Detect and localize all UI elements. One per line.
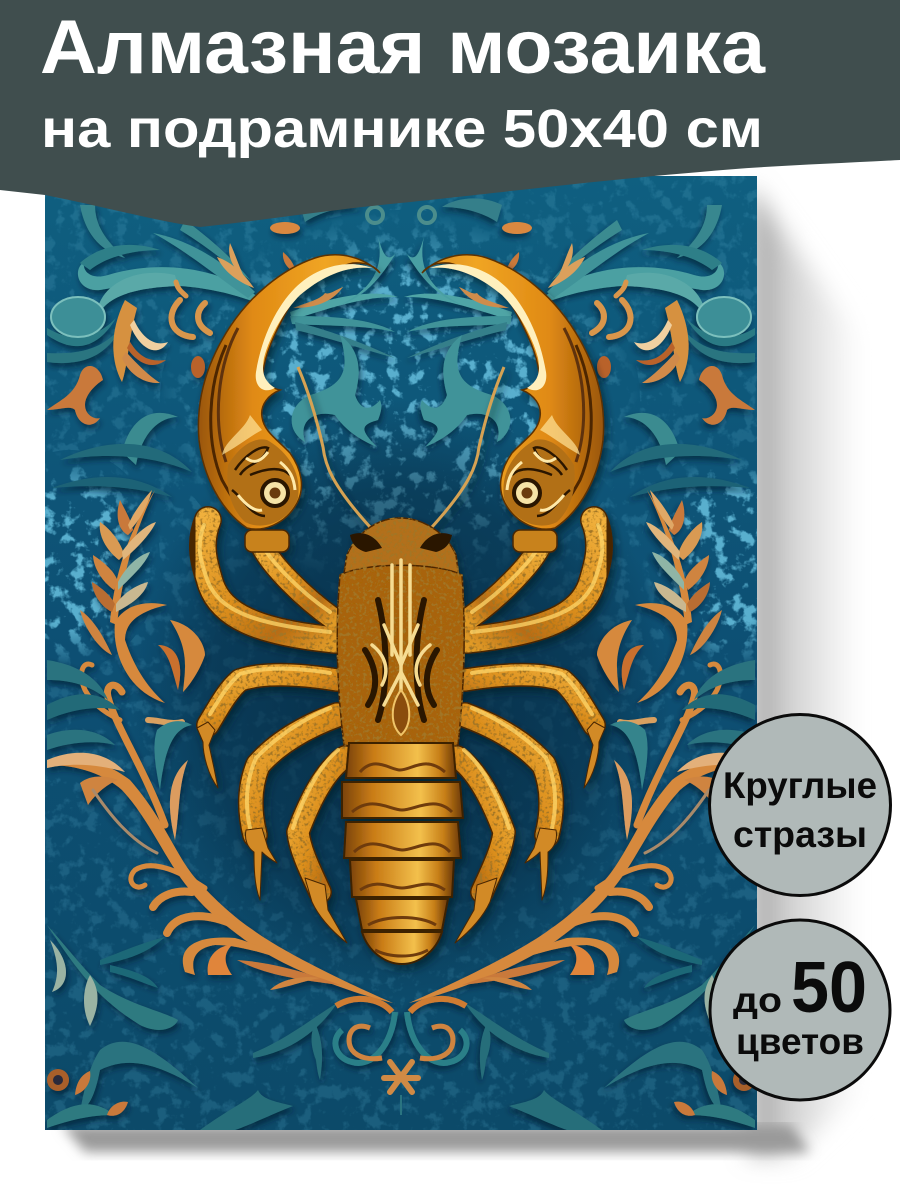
ornaments: right [404,198,755,1130]
shadow around the scorpion [150,410,650,974]
abdomen engraving [352,764,452,956]
canvas shadow: right [750,185,860,1155]
painting mottled texture [45,176,757,1130]
subtitle: на подрамнике 50х40 см [41,99,763,159]
badge: up to 50 colours: 50 [791,948,867,1028]
painting background [45,176,757,1130]
thorax ornament [365,560,437,735]
legs right [455,520,605,943]
eyes [350,533,452,552]
scorpion [197,255,605,964]
badge: round rhinestones: Круглые [723,765,877,806]
badge: up to 50 colours: до [733,981,782,1020]
title: Алмазная мозаика [40,5,766,90]
head [342,518,460,585]
claw right [422,255,604,529]
claw left [198,255,380,529]
badge: round rhinestones: стразы [733,814,867,855]
badge: up to 50 colours [710,920,890,1100]
thorax [337,565,464,750]
badge: up to 50 colours: цветов [736,1021,864,1062]
painting [45,176,757,1130]
antennae [298,367,504,527]
legs left [197,520,347,943]
abdomen [342,743,463,964]
ornament: centre top curls and bottom star [367,207,435,1115]
ornaments: left [47,198,398,1130]
canvas shadow: bottom [62,1125,810,1152]
header banner [0,0,900,227]
badge: round rhinestones [710,714,890,896]
